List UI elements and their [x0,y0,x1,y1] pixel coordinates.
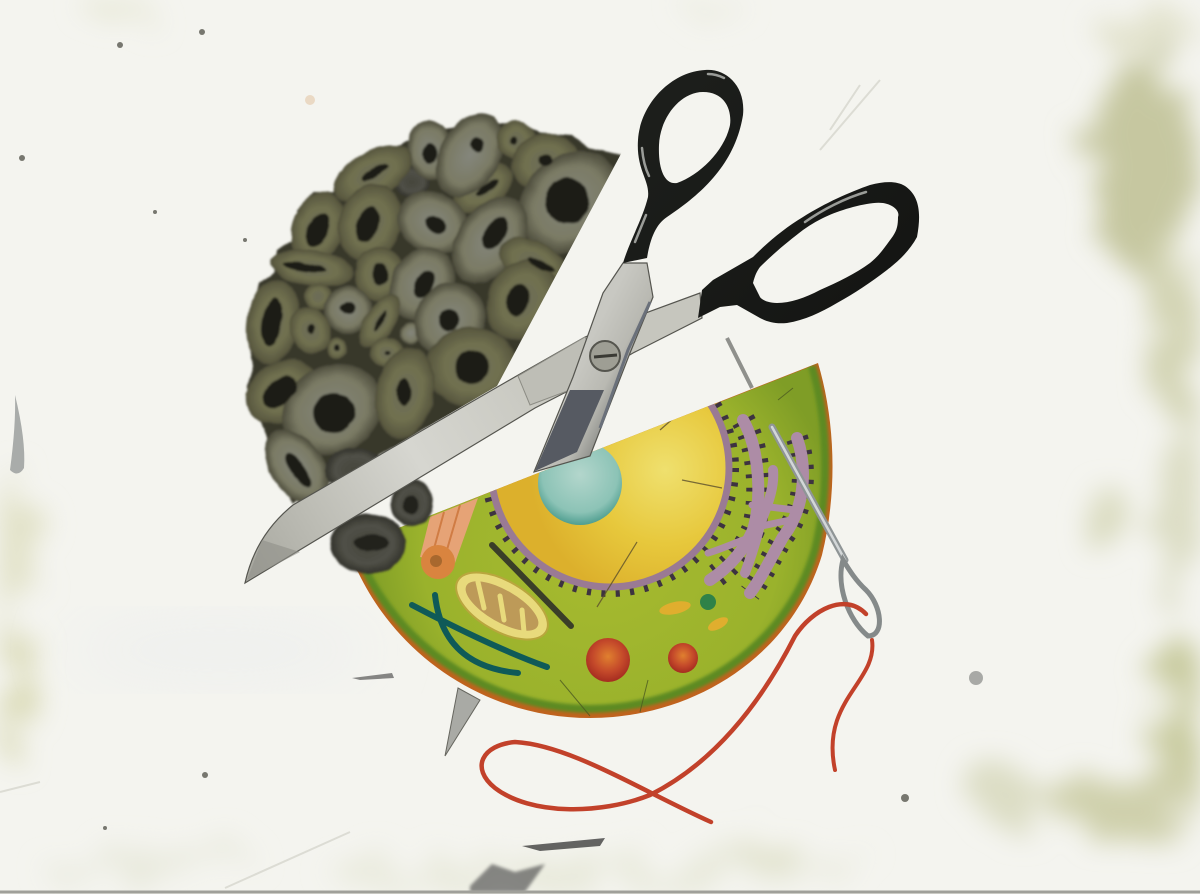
brain lower lumps [330,479,433,574]
brain folds [244,112,614,502]
centriole rod [420,498,478,579]
scissors lower blade tip [445,688,480,756]
cell scratches [560,388,793,716]
blade edge line [600,302,650,428]
brain cell holes [257,136,589,490]
small vesicles [658,594,730,634]
cytoplasm edge shading [365,366,825,709]
cell half [340,346,833,718]
cell cytoplasm [345,366,825,709]
pivot screw [590,341,620,371]
brain silhouette [247,120,622,503]
dark rod [492,545,571,626]
endoplasmic reticulum [708,420,803,593]
nuclear membrane pores [484,402,739,597]
nucleus scratch [596,420,722,608]
needle [727,338,879,636]
right handle [698,182,919,323]
upper handle [623,70,743,263]
organelles: red spheres [586,638,698,682]
teal fibres [412,595,547,673]
needle eye [841,560,879,636]
brain half [234,101,642,574]
blade tip shading [247,540,300,580]
long blade [245,293,702,583]
cell membrane [340,363,833,718]
nucleolus [538,441,622,525]
scissors [245,70,919,583]
red thread [482,604,872,822]
mitochondrion [445,559,559,653]
endoplasmic reticulum pores [710,420,803,593]
blade fold [518,337,590,405]
nucleus [490,404,732,590]
short blade [534,263,653,472]
handle highlights [635,74,866,242]
blade shadow [535,390,604,471]
main brain mass [244,112,622,505]
